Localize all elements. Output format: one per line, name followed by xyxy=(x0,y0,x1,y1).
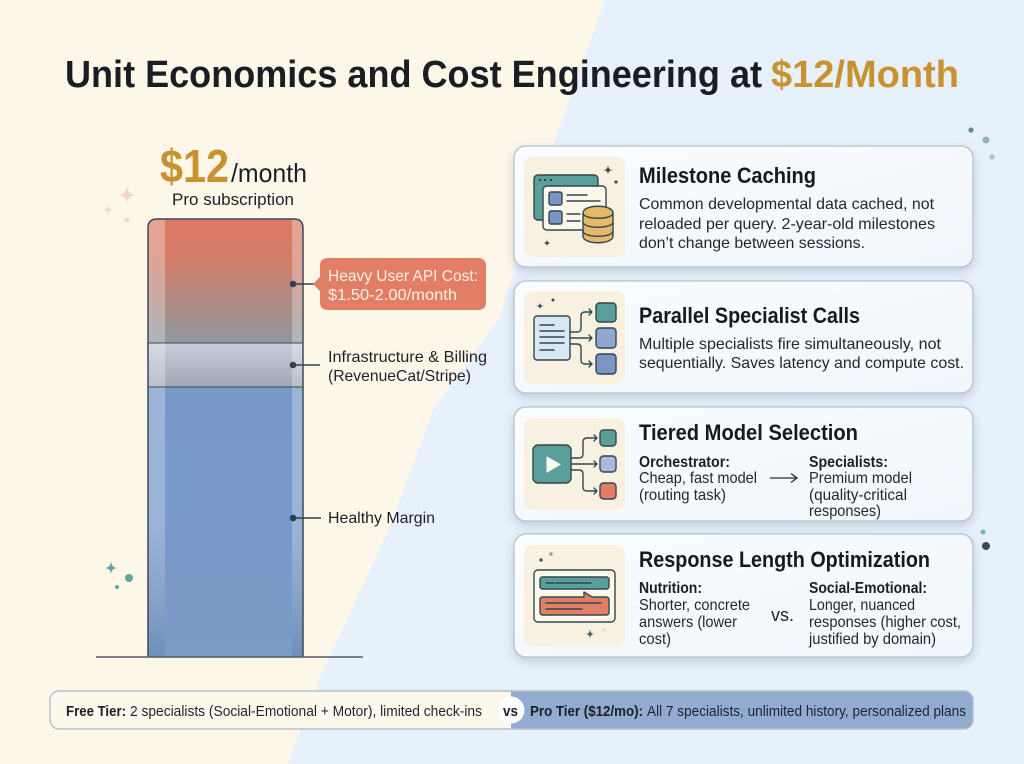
text: orchestrator xyxy=(639,454,757,504)
callout: heavy user API cost: Heavy User API Cost: xyxy=(328,268,478,285)
text: specialists: Premium model xyxy=(809,470,912,487)
comparison bar: free versus pro tier xyxy=(50,691,973,729)
panel: response length optimization xyxy=(514,534,973,657)
panel: milestone caching xyxy=(514,146,973,267)
segment: infrastructure and billing xyxy=(148,343,303,387)
text: milestone caching description xyxy=(639,196,935,252)
segment: healthy margin xyxy=(148,387,303,657)
label: healthy margin: Healthy Margin xyxy=(328,510,435,527)
text: milestone caching description: Common developmental data cached, not xyxy=(639,196,935,213)
panel: tiered model selection xyxy=(514,407,973,521)
label: infrastructure and billing xyxy=(290,349,487,385)
icon: short and long response bubbles xyxy=(524,545,625,647)
price heading: Pro subscription xyxy=(172,190,294,209)
icon: cached data windows and database xyxy=(524,157,625,257)
text: nutrition: cost) xyxy=(639,631,671,648)
callout: heavy user API cost xyxy=(290,258,486,310)
text: nutrition: Nutrition: xyxy=(639,580,702,597)
text: social-emotional: Longer, nuanced xyxy=(809,597,915,614)
panel: parallel specialist calls xyxy=(514,281,973,393)
vs badge: vs xyxy=(503,703,518,720)
icon: document fanning out to specialists xyxy=(524,291,625,384)
price heading xyxy=(160,140,307,209)
decorative dots: right middle xyxy=(980,530,990,550)
text: nutrition: Shorter, concrete xyxy=(639,597,750,614)
pro tier text: All 7 specialists, unlimited history, personalized plans xyxy=(647,703,966,720)
label: infrastructure and billing: (RevenueCat/Stripe) xyxy=(328,368,471,385)
pro tier text xyxy=(530,703,966,720)
text: social-emotional: Social-Emotional: xyxy=(809,580,927,597)
segment: heavy user API cost xyxy=(148,219,303,343)
text: nutrition xyxy=(639,580,750,648)
label: infrastructure and billing: Infrastructure & Billing xyxy=(328,349,487,366)
text: parallel specialist description: Multiple specialists fire simultaneously, not xyxy=(639,336,942,353)
arrow: orchestrator to specialists xyxy=(770,474,797,482)
icon: orchestrator routing to models xyxy=(524,418,625,510)
pro tier text: Pro Tier ($12/mo): xyxy=(530,703,643,720)
text: orchestrator: Orchestrator: xyxy=(639,454,730,471)
text: specialists: Specialists: xyxy=(809,454,888,471)
baseline axis xyxy=(96,656,363,658)
price heading: $12 xyxy=(160,140,229,192)
text: versus: vs. xyxy=(771,605,794,625)
text: orchestrator: (routing task) xyxy=(639,487,726,504)
heading: milestone caching: Milestone Caching xyxy=(639,163,816,188)
title: $12/Month xyxy=(771,54,959,96)
text: specialists: (quality-critical xyxy=(809,487,907,504)
vs badge xyxy=(498,696,524,724)
text: specialists: responses) xyxy=(809,503,881,520)
price heading: /month xyxy=(231,158,307,188)
heading: response length optimization: Response Length Optimization xyxy=(639,547,930,572)
text: social-emotional: responses (higher cost, xyxy=(809,614,961,631)
text: parallel specialist description xyxy=(639,336,964,372)
stacked cost bar xyxy=(148,219,303,657)
free tier text: Free Tier: xyxy=(66,703,126,720)
free tier text: 2 specialists (Social-Emotional + Motor), limited check-ins xyxy=(130,703,482,720)
title: Unit Economics and Cost Engineering at xyxy=(65,54,762,96)
text: social-emotional: justified by domain) xyxy=(808,631,936,648)
heading: parallel specialist calls: Parallel Specialist Calls xyxy=(639,303,860,328)
callout: heavy user API cost: $1.50-2.00/month xyxy=(328,287,457,304)
heading: tiered model selection: Tiered Model Selection xyxy=(639,420,858,445)
text: milestone caching description: don’t change between sessions. xyxy=(639,235,865,252)
text: parallel specialist description: sequentially. Saves latency and compute cost. xyxy=(639,355,964,372)
decorative dots: top right xyxy=(968,127,994,160)
text: milestone caching description: reloaded per query. 2-year-old milestones xyxy=(639,216,935,233)
text: orchestrator: Cheap, fast model xyxy=(639,470,757,487)
sparkles: bottom left xyxy=(104,560,133,589)
text: specialists xyxy=(809,454,912,520)
sparkles: top left xyxy=(102,184,137,222)
text: nutrition: answers (lower xyxy=(639,614,738,631)
text: social-emotional xyxy=(808,580,961,648)
